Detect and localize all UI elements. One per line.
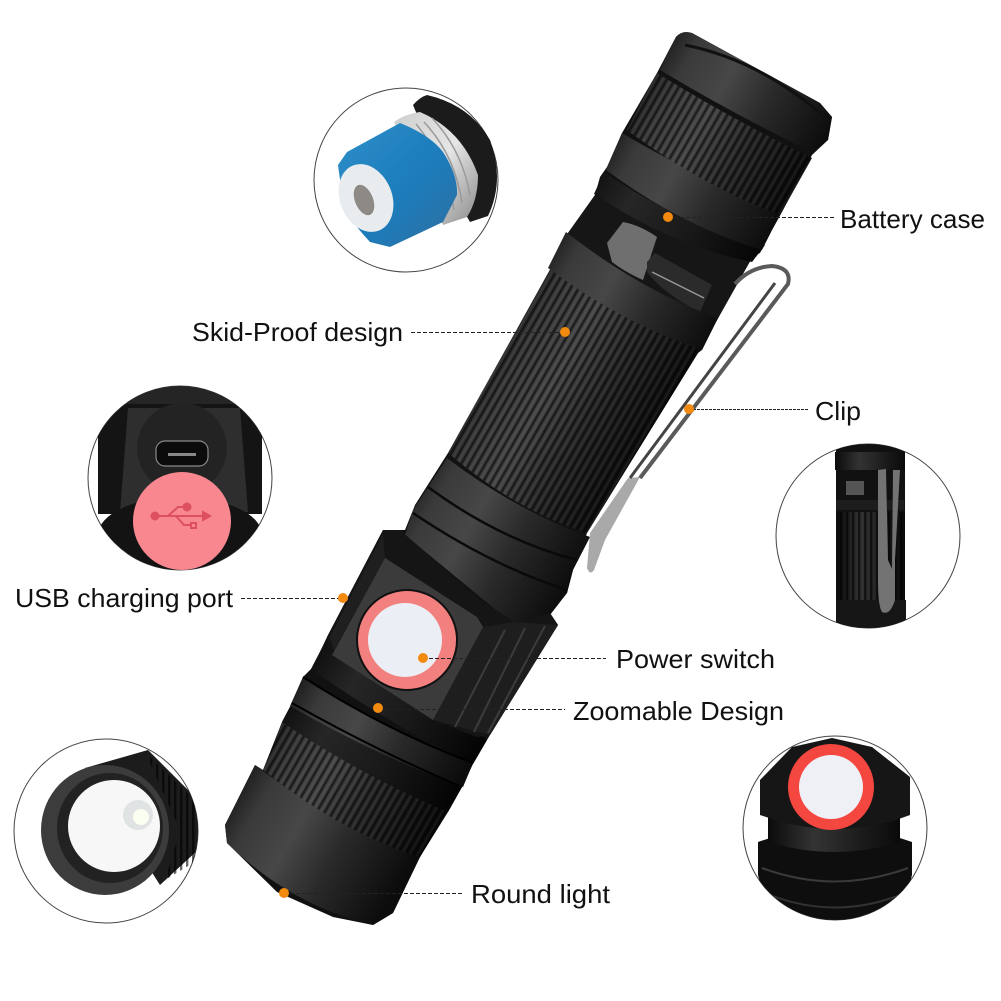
callout: round light: Round light xyxy=(471,879,611,909)
right wing xyxy=(433,622,558,735)
band above grip xyxy=(548,232,718,350)
lens bezel xyxy=(41,765,169,895)
flashlight xyxy=(225,32,832,925)
callout: clip: Clip xyxy=(815,396,861,426)
tail cap xyxy=(660,32,832,152)
upper body with window xyxy=(563,195,752,322)
zoom ring upper xyxy=(311,640,487,764)
callout: USB charging port: USB charging port xyxy=(15,583,234,613)
collar xyxy=(405,458,590,630)
callout: power switch xyxy=(418,644,775,674)
callout: USB charging port xyxy=(15,583,348,613)
upper knurled ring xyxy=(627,73,812,215)
callout: zoomable design xyxy=(373,696,784,726)
USB symbol xyxy=(152,504,210,528)
knurled grip xyxy=(448,266,702,533)
inset: power button xyxy=(743,736,927,925)
battery thread xyxy=(394,112,478,225)
button inset head xyxy=(760,738,910,829)
window xyxy=(607,222,657,280)
clip inset metal xyxy=(878,469,900,613)
head face xyxy=(332,558,483,720)
slider xyxy=(647,253,712,312)
LED xyxy=(123,800,153,830)
callout: power switch: Power switch xyxy=(616,644,775,674)
clip inset grip xyxy=(846,512,888,600)
inset: battery xyxy=(314,88,498,272)
lower knurled ring xyxy=(263,718,448,857)
battery band xyxy=(606,133,784,250)
callout: battery case xyxy=(663,204,985,234)
inset: USB port xyxy=(88,382,272,573)
thin ring xyxy=(594,172,765,262)
micro USB socket xyxy=(156,441,208,466)
switch head block xyxy=(327,530,558,737)
pocket clip xyxy=(587,266,789,573)
callout: zoomable design: Zoomable Design xyxy=(573,696,784,726)
inset red ring xyxy=(788,744,874,830)
inset: lens xyxy=(14,739,200,923)
battery terminal xyxy=(329,156,403,240)
bezel xyxy=(225,765,420,925)
button inset neck xyxy=(768,818,900,852)
callout: skid-proof design: Skid-Proof design xyxy=(192,317,403,347)
lens knurled barrel xyxy=(85,750,198,885)
lens glass xyxy=(68,780,160,872)
body silhouette xyxy=(225,32,832,925)
pink rubber cover xyxy=(133,472,231,570)
battery cap ring xyxy=(413,95,497,222)
inset: clip xyxy=(776,444,960,634)
callout: round light xyxy=(279,879,611,909)
zoom ring middle xyxy=(290,677,473,787)
callout: skid-proof design xyxy=(192,317,570,347)
inset white button xyxy=(799,755,863,819)
button inset rings xyxy=(758,838,912,920)
callout: battery case: Battery case xyxy=(840,204,985,234)
USB recess xyxy=(137,403,227,493)
USB lower ring xyxy=(101,503,259,570)
blue battery xyxy=(338,123,457,247)
zoom ring lower xyxy=(282,703,462,812)
left wing xyxy=(330,534,385,650)
USB body xyxy=(98,395,262,514)
power button xyxy=(356,589,458,691)
callout: clip xyxy=(684,396,861,426)
